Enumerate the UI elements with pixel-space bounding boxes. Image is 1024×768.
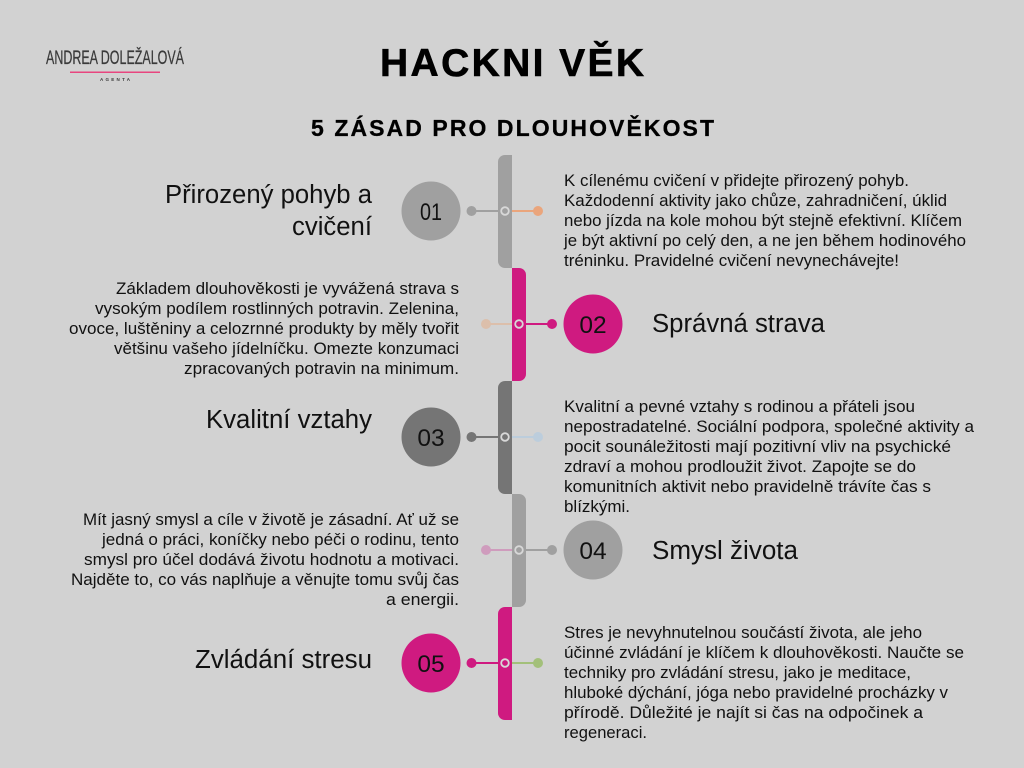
title: HACKNI VĚK xyxy=(380,41,644,85)
text block 01: nebo jízda na kole mohou být stejně efektivní. Klíčem xyxy=(564,211,962,230)
panel: 05 zvládání stresu xyxy=(195,607,964,742)
heading: kvalitní vztahy: Kvalitní vztahy xyxy=(206,406,372,434)
text block 04: Najděte to, co vás naplňuje a věnujte tomu svůj čas xyxy=(71,570,459,589)
text block 05: přírodě. Důležité je najít si čas na odpočinek a xyxy=(564,703,924,722)
text block 03: nepostradatelné. Sociální podpora, společné aktivity a xyxy=(564,417,975,436)
text block 02 xyxy=(69,279,459,378)
text block 03: blízkými. xyxy=(564,497,630,516)
heading: přirozený pohyb a cvičení xyxy=(165,181,373,241)
text block 05: techniky pro zvládání stresu, jako je meditace, xyxy=(564,663,911,682)
text block 05: hluboké dýchání, jóga nebo pravidelné procházky v xyxy=(564,683,948,702)
number circle 05: 05 xyxy=(417,651,445,678)
text block 01: tréninku. Pravidelné cvičení nevynechávejte! xyxy=(564,251,899,270)
number circle 03 xyxy=(402,408,460,466)
text block 02: zpracovaných potravin na minimum. xyxy=(184,359,459,378)
text block 05 xyxy=(564,623,964,742)
timeline segment 03 xyxy=(466,381,543,494)
logo xyxy=(46,47,184,82)
number circle 04: 04 xyxy=(579,538,607,565)
text block 03 xyxy=(564,397,975,516)
heading: přirozený pohyb a cvičení: Přirozený pohyb a xyxy=(165,181,373,209)
panel: 03 kvalitní vztahy xyxy=(206,381,975,516)
text block 03: Kvalitní a pevné vztahy s rodinou a přáteli jsou xyxy=(564,397,915,416)
number circle 01: 01 xyxy=(420,199,442,226)
timeline segment 02 xyxy=(481,268,557,381)
heading: smysl života: Smysl života xyxy=(652,537,799,565)
heading: přirozený pohyb a cvičení: cvičení xyxy=(292,213,372,241)
text block 04: jedná o práci, koníčky nebo péči o rodinu, tento xyxy=(101,530,459,549)
text block 03: pocit sounáležitosti mají pozitivní vliv na psychické xyxy=(564,437,951,456)
logo: AGENTA xyxy=(100,77,131,82)
number circle 04 xyxy=(564,520,622,580)
text block 05: Stres je nevyhnutelnou součástí života, ale jeho xyxy=(564,623,922,642)
subtitle: 5 ZÁSAD PRO DLOUHOVĚKOST xyxy=(311,114,714,141)
text block 05: účinné zvládání je klíčem k dlouhověkosti. Naučte se xyxy=(564,643,964,662)
number circle 02: 02 xyxy=(579,312,607,339)
text block 01: je být aktivní po celý den, a ne jen během hodinového xyxy=(563,231,966,250)
text block 05: regeneraci. xyxy=(564,723,647,742)
timeline segment 04 xyxy=(481,494,557,607)
text block 04 xyxy=(71,510,459,609)
heading: zvládání stresu: Zvládání stresu xyxy=(195,646,372,674)
text block 04: smysl pro účel dodává životu hodnotu a motivaci. xyxy=(84,550,459,569)
timeline segment 05 xyxy=(466,607,543,720)
text block 02: ovoce, luštěniny a celozrnné produkty by měly tvořit xyxy=(69,319,459,338)
heading: správná strava: Správná strava xyxy=(652,310,826,338)
text block 01: K cílenému cvičení v přidejte přirozený pohyb. xyxy=(564,171,909,190)
logo: ANDREA DOLEŽALOVÁ xyxy=(46,47,184,69)
text block 02: Základem dlouhověkosti je vyvážená strava s xyxy=(116,279,459,298)
text block 01: Každodenní aktivity jako chůze, zahradničení, úklid xyxy=(564,191,947,210)
number circle 02 xyxy=(564,294,622,354)
number circle 03: 03 xyxy=(417,425,445,452)
text block 04: Mít jasný smysl a cíle v životě je zásadní. Ať už se xyxy=(83,510,459,529)
text block 01 xyxy=(563,171,966,270)
text block 02: vysokým podílem rostlinných potravin. Zelenina, xyxy=(95,299,459,318)
text block 02: většinu vašeho jídelníčku. Omezte konzumaci xyxy=(114,339,459,358)
number circle 01 xyxy=(402,182,460,240)
panel: 02 správná strava xyxy=(69,268,826,381)
panel: 04 smysl života xyxy=(71,494,799,609)
text block 04: a energii. xyxy=(386,590,459,609)
number circle 05 xyxy=(402,634,460,692)
text block 03: komunitních aktivit nebo pravidelně trávíte čas s xyxy=(564,477,931,496)
panel: 01 přirozený pohyb xyxy=(165,155,966,270)
timeline segment 01 xyxy=(466,155,543,268)
text block 03: zdraví a mohou prodloužit život. Zapojte se do xyxy=(564,457,916,476)
